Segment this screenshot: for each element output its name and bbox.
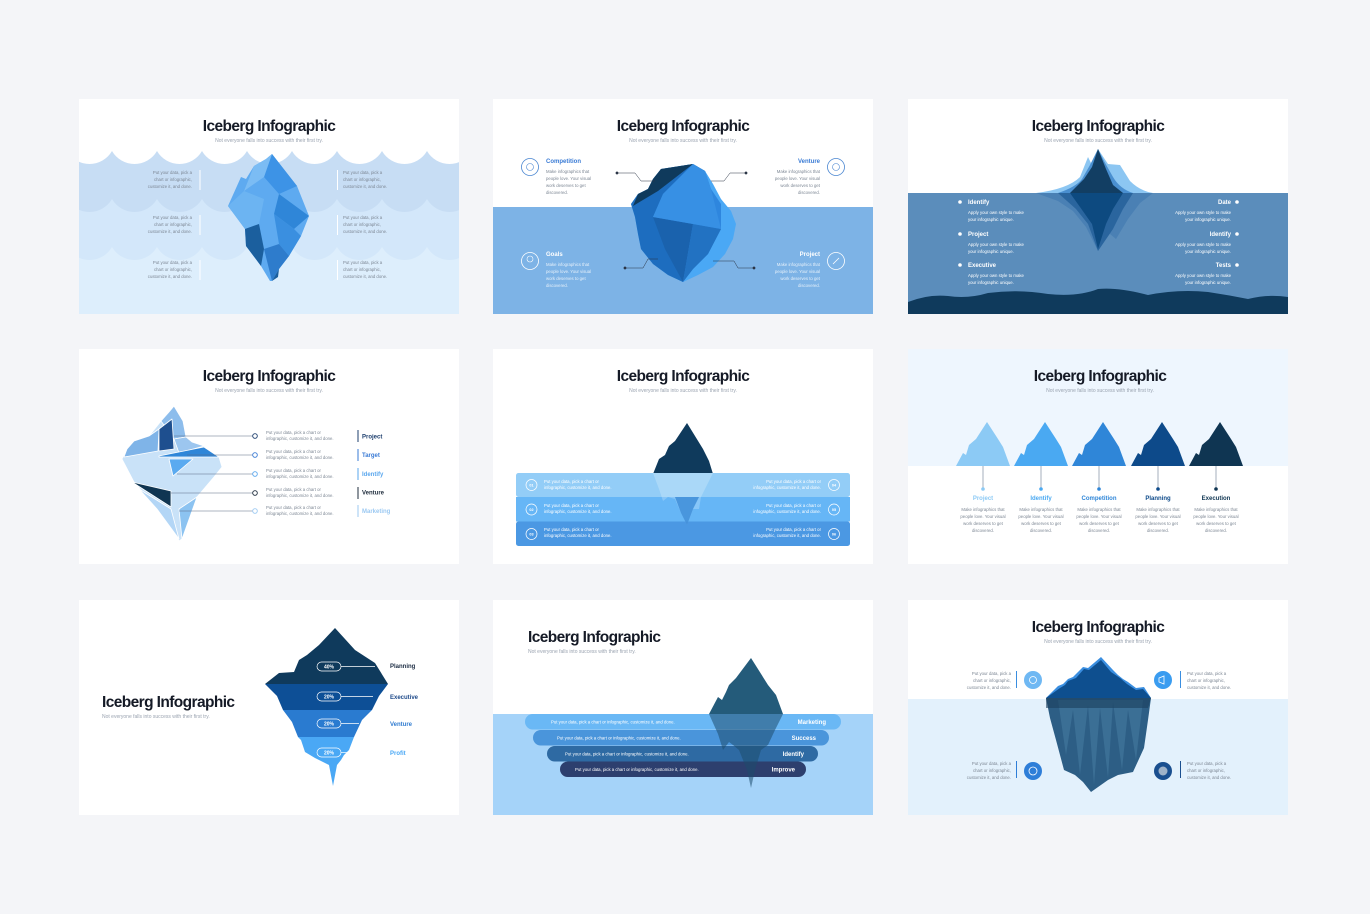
labels: Profit — [390, 751, 406, 757]
list right: Date — [1218, 200, 1232, 206]
item: Project: Make infographics that — [777, 262, 821, 267]
labels: work deserves to get — [1138, 521, 1179, 526]
band labels: 01 — [529, 484, 534, 488]
item: Venture: Venture — [798, 159, 821, 165]
item: top-right: customize it, and done. — [1187, 685, 1231, 690]
band labels: Put your data, pick a chart or — [766, 479, 822, 484]
labels: Planning — [390, 664, 416, 670]
stems — [981, 466, 1218, 491]
panel: slide 3 deep water — [908, 99, 1288, 314]
list right — [1175, 200, 1239, 285]
item: top-left: Put your data, pick a — [972, 671, 1012, 676]
title: Iceberg Infographic — [617, 118, 750, 135]
list left: Project — [968, 232, 988, 238]
item: bottom-left: Put your data, pick a — [972, 761, 1012, 766]
band labels: Put your data, pick a chart or — [766, 527, 822, 532]
subtitle: Not everyone falls into success with their first try. — [215, 388, 323, 394]
item: Goals: discovered. — [546, 283, 568, 288]
labels: Project — [973, 496, 993, 502]
labels — [960, 496, 1239, 533]
item: bottom-right: customize it, and done. — [1187, 775, 1231, 780]
text blocks right: customize it, and done. — [343, 184, 387, 189]
list left: Apply your own style to make — [968, 210, 1024, 215]
item: Venture: people love. Your visual — [775, 176, 820, 181]
iceberg tip — [653, 423, 713, 474]
item: bottom-right: Put your data, pick a — [1187, 761, 1227, 766]
connector lines — [171, 434, 257, 513]
list items: Target — [362, 453, 380, 459]
text blocks right: chart or infographic, — [343, 177, 381, 182]
item: Goals: Goals — [546, 252, 563, 258]
band labels: infographic, customize it, and done. — [753, 533, 821, 538]
list right: your infographic unique. — [1185, 217, 1231, 222]
band labels: 02 — [529, 508, 534, 512]
text blocks left: Put your data, pick a — [153, 260, 193, 265]
list right: Tests — [1216, 263, 1232, 269]
list items: Identify — [362, 472, 384, 478]
pill text: Identify — [783, 752, 805, 758]
labels: Make infographics that — [1136, 507, 1180, 512]
labels: people love. Your visual — [1135, 514, 1181, 519]
subtitle: Not everyone falls into success with their first try. — [629, 138, 737, 144]
title: Iceberg Infographic — [1034, 368, 1167, 385]
item: bottom-left: chart or infographic, — [973, 768, 1011, 773]
band labels: 03 — [529, 532, 534, 536]
pill text: Success — [792, 736, 817, 742]
band labels: Put your data, pick a chart or — [544, 527, 600, 532]
item: Goals: work deserves to get — [546, 276, 586, 281]
list right: your infographic unique. — [1185, 249, 1231, 254]
list left — [958, 200, 1024, 285]
list right: Apply your own style to make — [1175, 210, 1232, 215]
item: Goals: Make infographics that — [546, 262, 590, 267]
bands — [516, 473, 850, 546]
labels: work deserves to get — [963, 521, 1004, 526]
labels — [390, 664, 419, 757]
labels: Make infographics that — [1194, 507, 1238, 512]
title: Iceberg Infographic — [528, 629, 661, 646]
text blocks left — [148, 170, 200, 280]
list items: Venture — [362, 490, 385, 496]
text blocks right — [337, 170, 387, 280]
text blocks right: customize it, and done. — [343, 229, 387, 234]
labels: discovered. — [1147, 528, 1169, 533]
band labels: Put your data, pick a chart or — [544, 479, 600, 484]
labels: people love. Your visual — [1193, 514, 1239, 519]
band labels: infographic, customize it, and done. — [544, 509, 612, 514]
subtitle: Not everyone falls into success with their first try. — [1046, 388, 1154, 394]
labels: people love. Your visual — [1018, 514, 1064, 519]
list right: Apply your own style to make — [1175, 242, 1232, 247]
item: Project: discovered. — [798, 283, 820, 288]
item: Project: work deserves to get — [780, 276, 821, 281]
text blocks right: chart or infographic, — [343, 267, 381, 272]
labels: people love. Your visual — [1076, 514, 1122, 519]
list items: Put your data, pick a chart or — [266, 468, 322, 473]
percent pills: 40% — [324, 664, 335, 670]
labels: Execution — [1202, 496, 1231, 502]
labels: Executive — [390, 695, 419, 701]
text blocks left: chart or infographic, — [154, 222, 192, 227]
text blocks right: customize it, and done. — [343, 274, 387, 279]
labels: people love. Your visual — [960, 514, 1006, 519]
panel: slide 4 faceted iceberg list — [79, 349, 459, 564]
labels: Make infographics that — [1019, 507, 1063, 512]
item: bottom-left — [967, 761, 1042, 780]
subtitle: Not everyone falls into success with their first try. — [1044, 639, 1152, 645]
text blocks right: Put your data, pick a — [343, 170, 383, 175]
item: Venture — [775, 158, 844, 195]
text blocks right: chart or infographic, — [343, 222, 381, 227]
labels: Competition — [1082, 496, 1117, 502]
panel: slide 9 icons iceberg — [908, 600, 1288, 815]
iceberg layers — [265, 628, 388, 786]
percent pills: 20% — [324, 722, 335, 728]
list items: Put your data, pick a chart or — [266, 505, 322, 510]
band labels: 06 — [832, 532, 836, 536]
pill text: Improve — [772, 768, 796, 774]
item: Project: Project — [800, 252, 820, 258]
percent pills: 20% — [324, 694, 335, 700]
item: Competition: discovered. — [546, 190, 568, 195]
text blocks left: Put your data, pick a — [153, 170, 193, 175]
iceberg — [709, 658, 783, 714]
item: top-left — [967, 671, 1042, 690]
labels: work deserves to get — [1079, 521, 1120, 526]
list items: infographic, customize it, and done. — [266, 493, 334, 498]
list left: your infographic unique. — [968, 280, 1014, 285]
pills — [525, 714, 841, 788]
text blocks right: Put your data, pick a — [343, 215, 383, 220]
band labels: infographic, customize it, and done. — [544, 485, 612, 490]
band labels — [526, 479, 840, 540]
item: bottom-right — [1154, 761, 1231, 780]
item: bottom-left: customize it, and done. — [967, 775, 1011, 780]
panel: slide 6 five peaks — [908, 349, 1288, 564]
item: top-right: chart or infographic, — [1187, 678, 1225, 683]
iceberg — [1036, 149, 1153, 251]
pill text: Put your data, pick a chart or infographic, customize it, and done. — [551, 720, 675, 724]
item: Project — [775, 252, 844, 288]
item: Venture: work deserves to get — [780, 183, 821, 188]
panel: slide 2 iceberg with icons — [493, 99, 873, 314]
list items: infographic, customize it, and done. — [266, 436, 334, 441]
band labels: Put your data, pick a chart or — [766, 503, 822, 508]
pill text: Put your data, pick a chart or infographic, customize it, and done. — [575, 767, 699, 772]
text blocks left: customize it, and done. — [148, 274, 192, 279]
labels: discovered. — [1088, 528, 1110, 533]
labels: discovered. — [1205, 528, 1227, 533]
iceberg — [122, 406, 222, 541]
item: Competition — [522, 158, 591, 195]
item: Competition: work deserves to get — [546, 183, 586, 188]
list right: your infographic unique. — [1185, 280, 1231, 285]
item: bottom-right: chart or infographic, — [1187, 768, 1225, 773]
list right: Identify — [1210, 232, 1232, 238]
title: Iceberg Infographic — [1032, 118, 1165, 135]
list items: infographic, customize it, and done. — [266, 511, 334, 516]
band labels: infographic, customize it, and done. — [753, 485, 821, 490]
subtitle: Not everyone falls into success with their first try. — [528, 649, 636, 655]
peaks — [956, 422, 1243, 466]
item: Competition: people love. Your visual — [546, 176, 591, 181]
labels: Venture — [390, 722, 413, 728]
labels: Make infographics that — [961, 507, 1005, 512]
list items — [266, 430, 391, 517]
subtitle: Not everyone falls into success with their first try. — [629, 388, 737, 394]
labels: discovered. — [972, 528, 994, 533]
list left: Executive — [968, 263, 997, 269]
list left: your infographic unique. — [968, 217, 1014, 222]
title: Iceberg Infographic — [617, 368, 750, 385]
list items: Marketing — [362, 509, 391, 515]
item: Project: people love. Your visual — [775, 269, 820, 274]
band labels: Put your data, pick a chart or — [544, 503, 600, 508]
item: Competition: Competition — [546, 159, 581, 165]
panel: slide 1 waves — [67, 99, 479, 314]
list items: infographic, customize it, and done. — [266, 455, 334, 460]
percent pills: 20% — [324, 750, 335, 756]
item: Goals — [522, 252, 591, 288]
text blocks left: customize it, and done. — [148, 184, 192, 189]
labels: work deserves to get — [1021, 521, 1062, 526]
item: top-right: Put your data, pick a — [1187, 671, 1227, 676]
labels: Identify — [1030, 496, 1052, 502]
text blocks left: chart or infographic, — [154, 267, 192, 272]
band labels: 05 — [832, 508, 836, 512]
list items: infographic, customize it, and done. — [266, 474, 334, 479]
list left: Apply your own style to make — [968, 273, 1024, 278]
list left: Apply your own style to make — [968, 242, 1024, 247]
list items: Put your data, pick a chart or — [266, 487, 322, 492]
connector lines — [616, 172, 755, 269]
list items: Project — [362, 434, 382, 440]
labels: discovered. — [1030, 528, 1052, 533]
item: Competition: Make infographics that — [546, 169, 590, 174]
list right: Apply your own style to make — [1175, 273, 1232, 278]
band labels: infographic, customize it, and done. — [753, 509, 821, 514]
item: Venture: Make infographics that — [777, 169, 821, 174]
pill text: Marketing — [798, 720, 826, 726]
pill text: Put your data, pick a chart or infographic, customize it, and done. — [557, 736, 681, 740]
labels: Planning — [1145, 496, 1171, 502]
text blocks right: Put your data, pick a — [343, 260, 383, 265]
panel: slide 5 bands — [493, 349, 873, 564]
subtitle: Not everyone falls into success with their first try. — [1044, 138, 1152, 144]
item: top-left: chart or infographic, — [973, 678, 1011, 683]
band labels: 04 — [832, 484, 837, 488]
item: Goals: people love. Your visual — [546, 269, 591, 274]
title: Iceberg Infographic — [203, 118, 336, 135]
title: Iceberg Infographic — [203, 368, 336, 385]
title: Iceberg Infographic — [1032, 619, 1165, 636]
list items: Put your data, pick a chart or — [266, 430, 322, 435]
labels: work deserves to get — [1196, 521, 1237, 526]
iceberg — [631, 164, 736, 282]
labels: Make infographics that — [1077, 507, 1121, 512]
panel: slide 8 pills — [493, 600, 873, 815]
pill text: Put your data, pick a chart or infographic, customize it, and done. — [565, 752, 689, 756]
panel: slide 7 layered percentages — [79, 600, 459, 815]
percent pills — [317, 662, 375, 757]
list items: Put your data, pick a chart or — [266, 449, 322, 454]
list left: Identify — [968, 200, 990, 206]
pill text — [551, 720, 826, 774]
item: top-right — [1154, 671, 1231, 690]
item: top-left: customize it, and done. — [967, 685, 1011, 690]
item: Venture: discovered. — [798, 190, 820, 195]
text blocks left: Put your data, pick a — [153, 215, 193, 220]
iceberg faceted — [228, 154, 309, 281]
subtitle: Not everyone falls into success with their first try. — [102, 714, 210, 720]
text blocks left: chart or infographic, — [154, 177, 192, 182]
band labels: infographic, customize it, and done. — [544, 533, 612, 538]
iceberg — [1046, 657, 1151, 792]
subtitle: Not everyone falls into success with their first try. — [215, 138, 323, 144]
list left: your infographic unique. — [968, 249, 1014, 254]
text blocks left: customize it, and done. — [148, 229, 192, 234]
title: Iceberg Infographic — [102, 694, 235, 711]
